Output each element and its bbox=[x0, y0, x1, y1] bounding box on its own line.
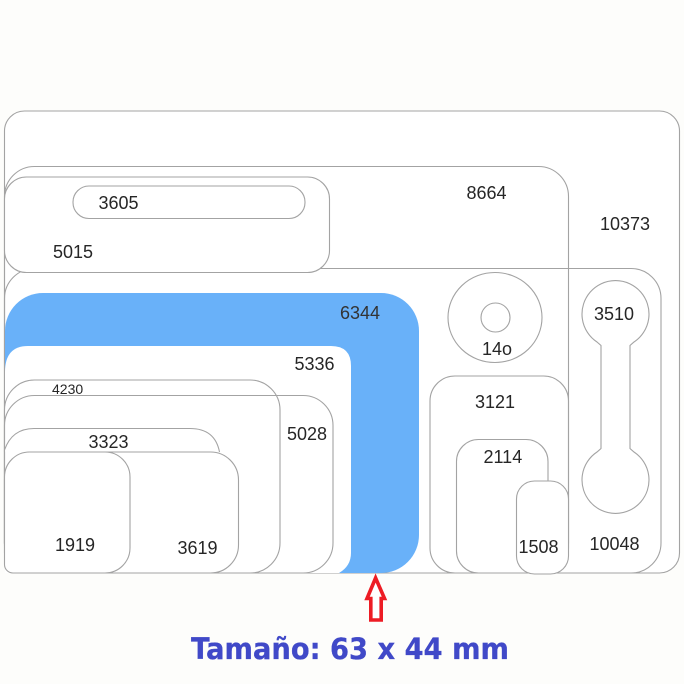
shape 3605 bbox=[73, 186, 305, 218]
shape 3510: dumbbell bbox=[582, 281, 649, 513]
shape 3323 bbox=[4, 428, 220, 452]
size caption: Tamaño: 63 x 44 mm bbox=[191, 632, 509, 666]
shape 14o: washer circle bbox=[448, 272, 542, 362]
shape 3619: 3619 bbox=[178, 538, 218, 558]
shape 4230 bbox=[4, 380, 280, 573]
shape 5336: 5336 bbox=[294, 354, 335, 374]
shape 1508: 1508 bbox=[518, 537, 559, 557]
shape 3619 bbox=[4, 452, 238, 573]
shape 6344: highlighted blue: 6344 bbox=[340, 303, 380, 323]
shape 14o: washer circle: 14o bbox=[482, 339, 512, 359]
shape 1919 bbox=[4, 452, 130, 573]
shape 6344: highlighted blue bbox=[5, 293, 419, 573]
shape 5336 bbox=[5, 346, 351, 573]
shape 2114 bbox=[456, 440, 548, 573]
shape 5015: 5015 bbox=[53, 242, 93, 262]
shape 3323: 3323 bbox=[88, 432, 129, 452]
shape 1508 bbox=[516, 481, 568, 574]
shape 5028 bbox=[4, 396, 333, 573]
shape 5015 bbox=[4, 177, 330, 272]
shape 5028: 5028 bbox=[287, 424, 327, 444]
shape 10373: outer rounded rectangle: 10373 bbox=[600, 214, 650, 234]
shape 10048: 10048 bbox=[590, 534, 640, 554]
shape 3121 bbox=[430, 376, 568, 573]
arrow bbox=[367, 578, 384, 620]
shape 3605: 3605 bbox=[98, 193, 139, 213]
shape 8664: 8664 bbox=[466, 183, 507, 203]
shape 1919: 1919 bbox=[55, 535, 95, 555]
shape 3510: dumbbell: 3510 bbox=[594, 304, 634, 324]
shape 2114: 2114 bbox=[484, 447, 522, 467]
shape 4230: 4230 bbox=[52, 381, 83, 397]
shape 3121: 3121 bbox=[475, 392, 515, 412]
